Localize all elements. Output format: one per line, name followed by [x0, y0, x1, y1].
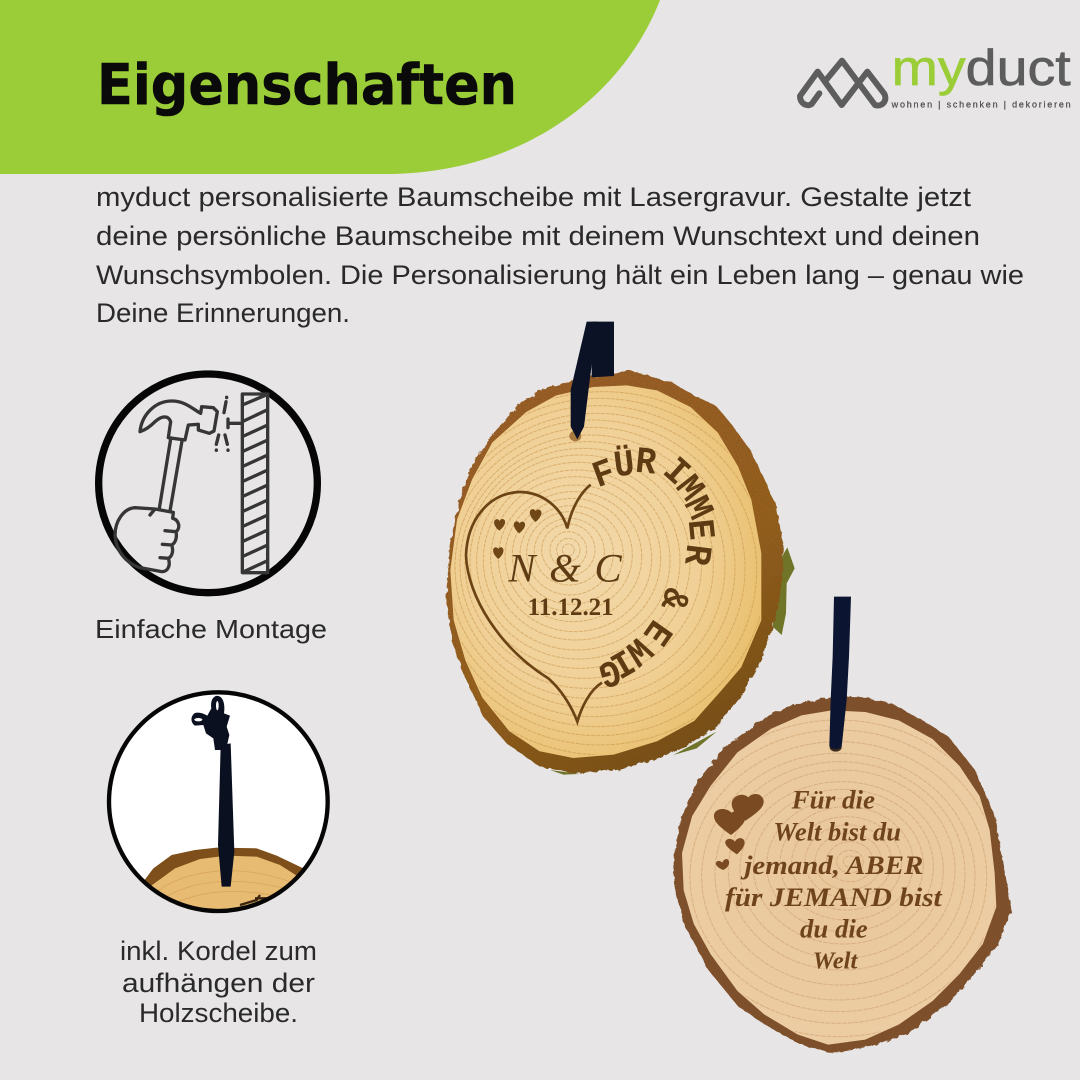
wood surface [683, 712, 995, 1043]
engraved arc text: R [674, 542, 719, 568]
description text: deine persönliche Baumscheibe mit deinem Wunschtext und deinen [96, 221, 980, 251]
caption: cord included: Holzscheibe. [139, 998, 298, 1028]
engraved arc text [587, 440, 722, 695]
icon: nail and sparks [216, 397, 240, 450]
engraved initials: N & C [507, 546, 623, 591]
caption: cord included: aufhängen der [122, 968, 315, 998]
logo tagline: wohnen | schenken | dekorieren [891, 99, 1071, 109]
description text: myduct personalisierte Baumscheibe mit Lasergravur. Gestalte jetzt [96, 182, 972, 212]
engraved arc text: M [674, 490, 721, 527]
description text: Deine Erinnerungen. [96, 298, 350, 328]
logo [800, 40, 1071, 109]
wood surface [152, 856, 296, 909]
bark ring [446, 370, 783, 773]
engraved arc text: I [654, 449, 698, 495]
bark ring [673, 697, 1012, 1053]
engraved arc text: F [587, 451, 621, 498]
icon: hammer [115, 394, 268, 573]
engraved small hearts [493, 509, 541, 559]
engraved quote: für JEMAND bist [725, 883, 943, 912]
bark edge detail [144, 848, 302, 886]
growth rings [454, 391, 760, 755]
engraved arc text: E [633, 611, 680, 653]
wood surface [452, 387, 760, 757]
engraved arc text: M [666, 468, 712, 510]
engraved arc text: W [616, 627, 659, 673]
title: Eigenschaften [97, 53, 517, 118]
engraved quote: Welt [813, 949, 859, 975]
growth rings [690, 720, 995, 1038]
icon: hammer and nail in circle [99, 374, 317, 593]
logo mountain mark [800, 61, 885, 105]
engraved quote [725, 785, 943, 975]
ribbon [571, 322, 614, 439]
description text: Wunschsymbolen. Die Personalisierung hält ein Leben lang – genau wie [96, 260, 1024, 290]
engraved arc text: G [594, 649, 625, 695]
cord and knot [191, 696, 234, 887]
engraved quote: jemand, ABER [740, 851, 923, 880]
description text [96, 182, 1024, 328]
photo: cord in circle [109, 692, 328, 918]
icon: fist [115, 508, 179, 572]
engraved arc text: E [677, 517, 722, 542]
engraved quote: Für die [791, 785, 875, 814]
engraved date: 11.12.21 [528, 593, 614, 621]
engraved quote: Welt bist du [773, 818, 901, 847]
wood slice: heart engraving [418, 322, 795, 775]
green header shape [0, 0, 660, 174]
hanging slot [830, 743, 842, 752]
caption: cord included [120, 936, 317, 1028]
engraved quote: du die [800, 914, 868, 943]
moss [550, 547, 795, 775]
caption: cord included: inkl. Kordel zum [120, 936, 317, 966]
engraved arc text: R [633, 440, 659, 485]
icon: wall [242, 394, 268, 573]
caption: easy mounting: Einfache Montage [95, 614, 327, 644]
engraved hearts [714, 794, 764, 870]
engraved heart [466, 485, 602, 722]
hanging slot [569, 431, 581, 441]
engraved arc text: & [650, 583, 697, 615]
wood slice: quote engraving [667, 597, 1012, 1053]
engraved arc text: Ü [611, 443, 637, 488]
ribbon [829, 597, 851, 749]
logo wordmark: myduct [892, 40, 1071, 96]
engraved arc text: I [602, 639, 641, 686]
